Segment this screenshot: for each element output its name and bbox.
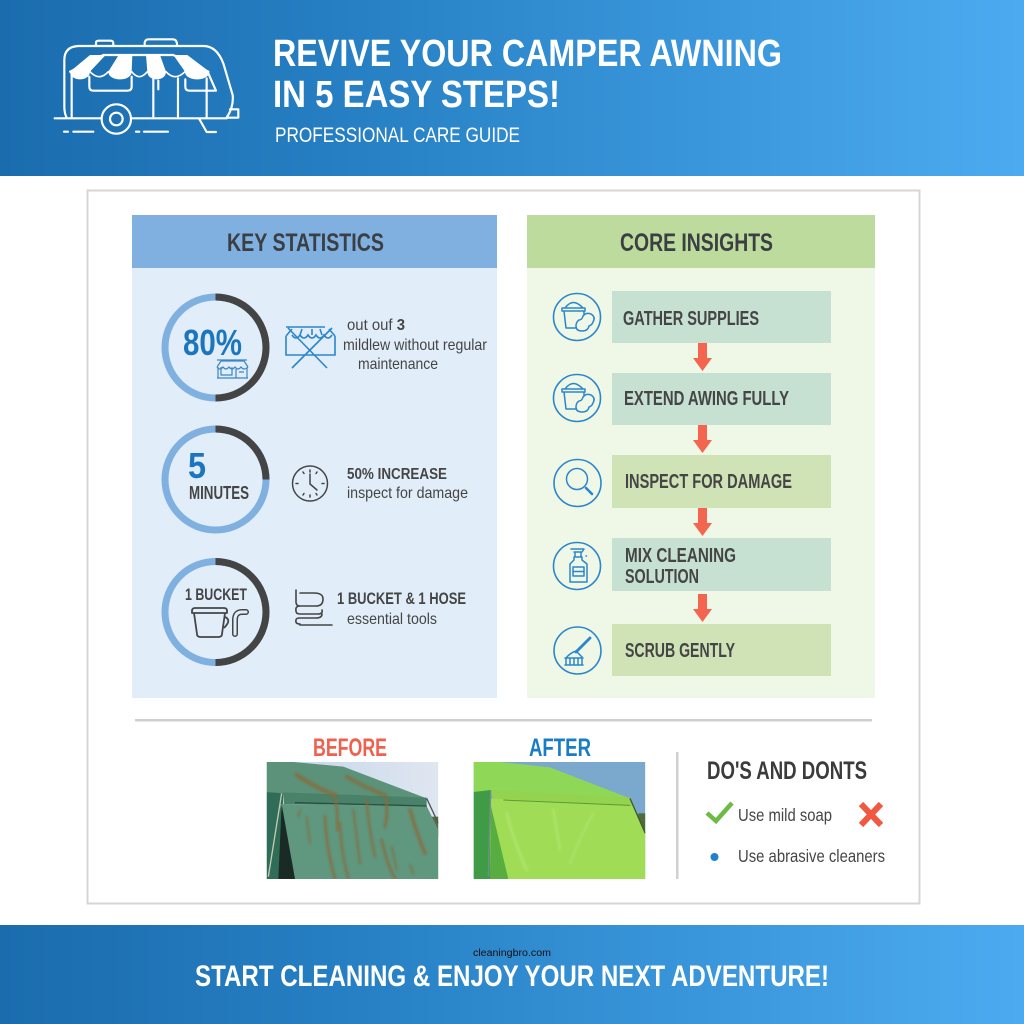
stat: 5 minutes ring bbox=[165, 429, 266, 530]
subtitle: PROFESSIONAL CARE GUIDE bbox=[275, 123, 520, 147]
stat text: mildew: mildlew without regular bbox=[343, 337, 488, 354]
source credit: cleaningbro.com bbox=[473, 948, 551, 959]
heading: core insights: CORE INSIGHTS bbox=[620, 229, 773, 257]
after photo bbox=[474, 734, 645, 879]
stat text: tools: 1 BUCKET & 1 HOSE bbox=[337, 590, 466, 608]
before photo: BEFORE bbox=[313, 734, 387, 762]
stat text: increase: inspect for damage bbox=[347, 485, 468, 502]
title: IN 5 EASY STEPS! bbox=[273, 74, 560, 116]
divider bbox=[135, 719, 872, 722]
image: stained tent bbox=[267, 762, 438, 879]
stat text: increase: 50% INCREASE bbox=[347, 466, 447, 483]
stat text: increase bbox=[347, 466, 468, 502]
heading: key statistics: KEY STATISTICS bbox=[227, 229, 384, 257]
arrow bbox=[693, 508, 712, 536]
icon: magnifier bbox=[554, 460, 601, 506]
stat: 80% ring bbox=[165, 297, 266, 398]
icon: bullet dot bbox=[710, 853, 718, 861]
header banner bbox=[0, 0, 1024, 176]
step 4: mix solution bbox=[612, 538, 831, 591]
step 3: inspect: INSPECT FOR DAMAGE bbox=[625, 471, 792, 493]
step 2: extend awning: EXTEND AWING FULLY bbox=[624, 388, 789, 410]
stat text: tools: essential tools bbox=[347, 611, 437, 628]
title bbox=[273, 33, 782, 116]
after photo: AFTER bbox=[529, 734, 591, 762]
stat text: tools bbox=[337, 590, 466, 628]
stat text: mildew: maintenance bbox=[358, 356, 438, 373]
step 4: mix solution: SOLUTION bbox=[625, 566, 699, 588]
arrow bbox=[693, 425, 712, 453]
panel: key statistics bbox=[132, 215, 497, 698]
step 4: mix solution: MIX CLEANING bbox=[625, 545, 736, 567]
step 1: gather supplies: GATHER SUPPLIES bbox=[623, 308, 759, 330]
stat: 80% ring: 80% bbox=[183, 322, 242, 363]
arrow bbox=[693, 594, 712, 622]
icon: camper with awning bbox=[55, 39, 238, 134]
heading: do's and don'ts: DO'S AND DONTS bbox=[707, 757, 867, 785]
stat: 5 minutes ring: 5 bbox=[188, 445, 206, 486]
arrow bbox=[693, 343, 712, 371]
panel: core insights bbox=[527, 215, 875, 698]
footer call to action: START CLEANING & ENJOY YOUR NEXT ADVENTURE! bbox=[195, 960, 829, 993]
stat: 1 bucket ring: 1 BUCKET bbox=[185, 585, 247, 604]
image: clean tent bbox=[474, 762, 645, 879]
footer banner bbox=[0, 925, 1024, 1024]
before photo bbox=[267, 734, 438, 879]
stat text: mildew bbox=[343, 317, 488, 373]
step 2: extend awning bbox=[612, 373, 831, 425]
step 5: scrub bbox=[612, 624, 831, 676]
step 5: scrub: SCRUB GENTLY bbox=[625, 640, 735, 662]
icon: bucket and sponge bbox=[554, 374, 600, 422]
icon: cross mark bbox=[861, 804, 881, 825]
panel: do's and don'ts bbox=[695, 755, 895, 870]
icon: clock bbox=[292, 466, 328, 501]
step 3: inspect bbox=[612, 455, 831, 508]
text: use abrasive cleaners: Use abrasive cleaners bbox=[738, 846, 885, 866]
stat: 5 minutes ring: MINUTES bbox=[189, 483, 249, 503]
icon: brush bbox=[554, 627, 601, 674]
text: use mild soap: Use mild soap bbox=[738, 805, 832, 825]
icon: awning stand bbox=[286, 327, 335, 368]
do's and don'ts divider bbox=[676, 752, 678, 879]
icon: check mark bbox=[707, 803, 732, 821]
step 1: gather supplies bbox=[612, 291, 831, 343]
icon: spray bottle bbox=[554, 542, 600, 590]
title: REVIVE YOUR CAMPER AWNING bbox=[273, 33, 782, 75]
main content frame bbox=[88, 190, 920, 904]
stat text: mildew: out ouf 3 bbox=[347, 317, 405, 334]
stat: 1 bucket ring bbox=[165, 562, 266, 662]
icon: bucket and sponge bbox=[554, 294, 600, 340]
icon: coiled hose bbox=[296, 590, 332, 625]
